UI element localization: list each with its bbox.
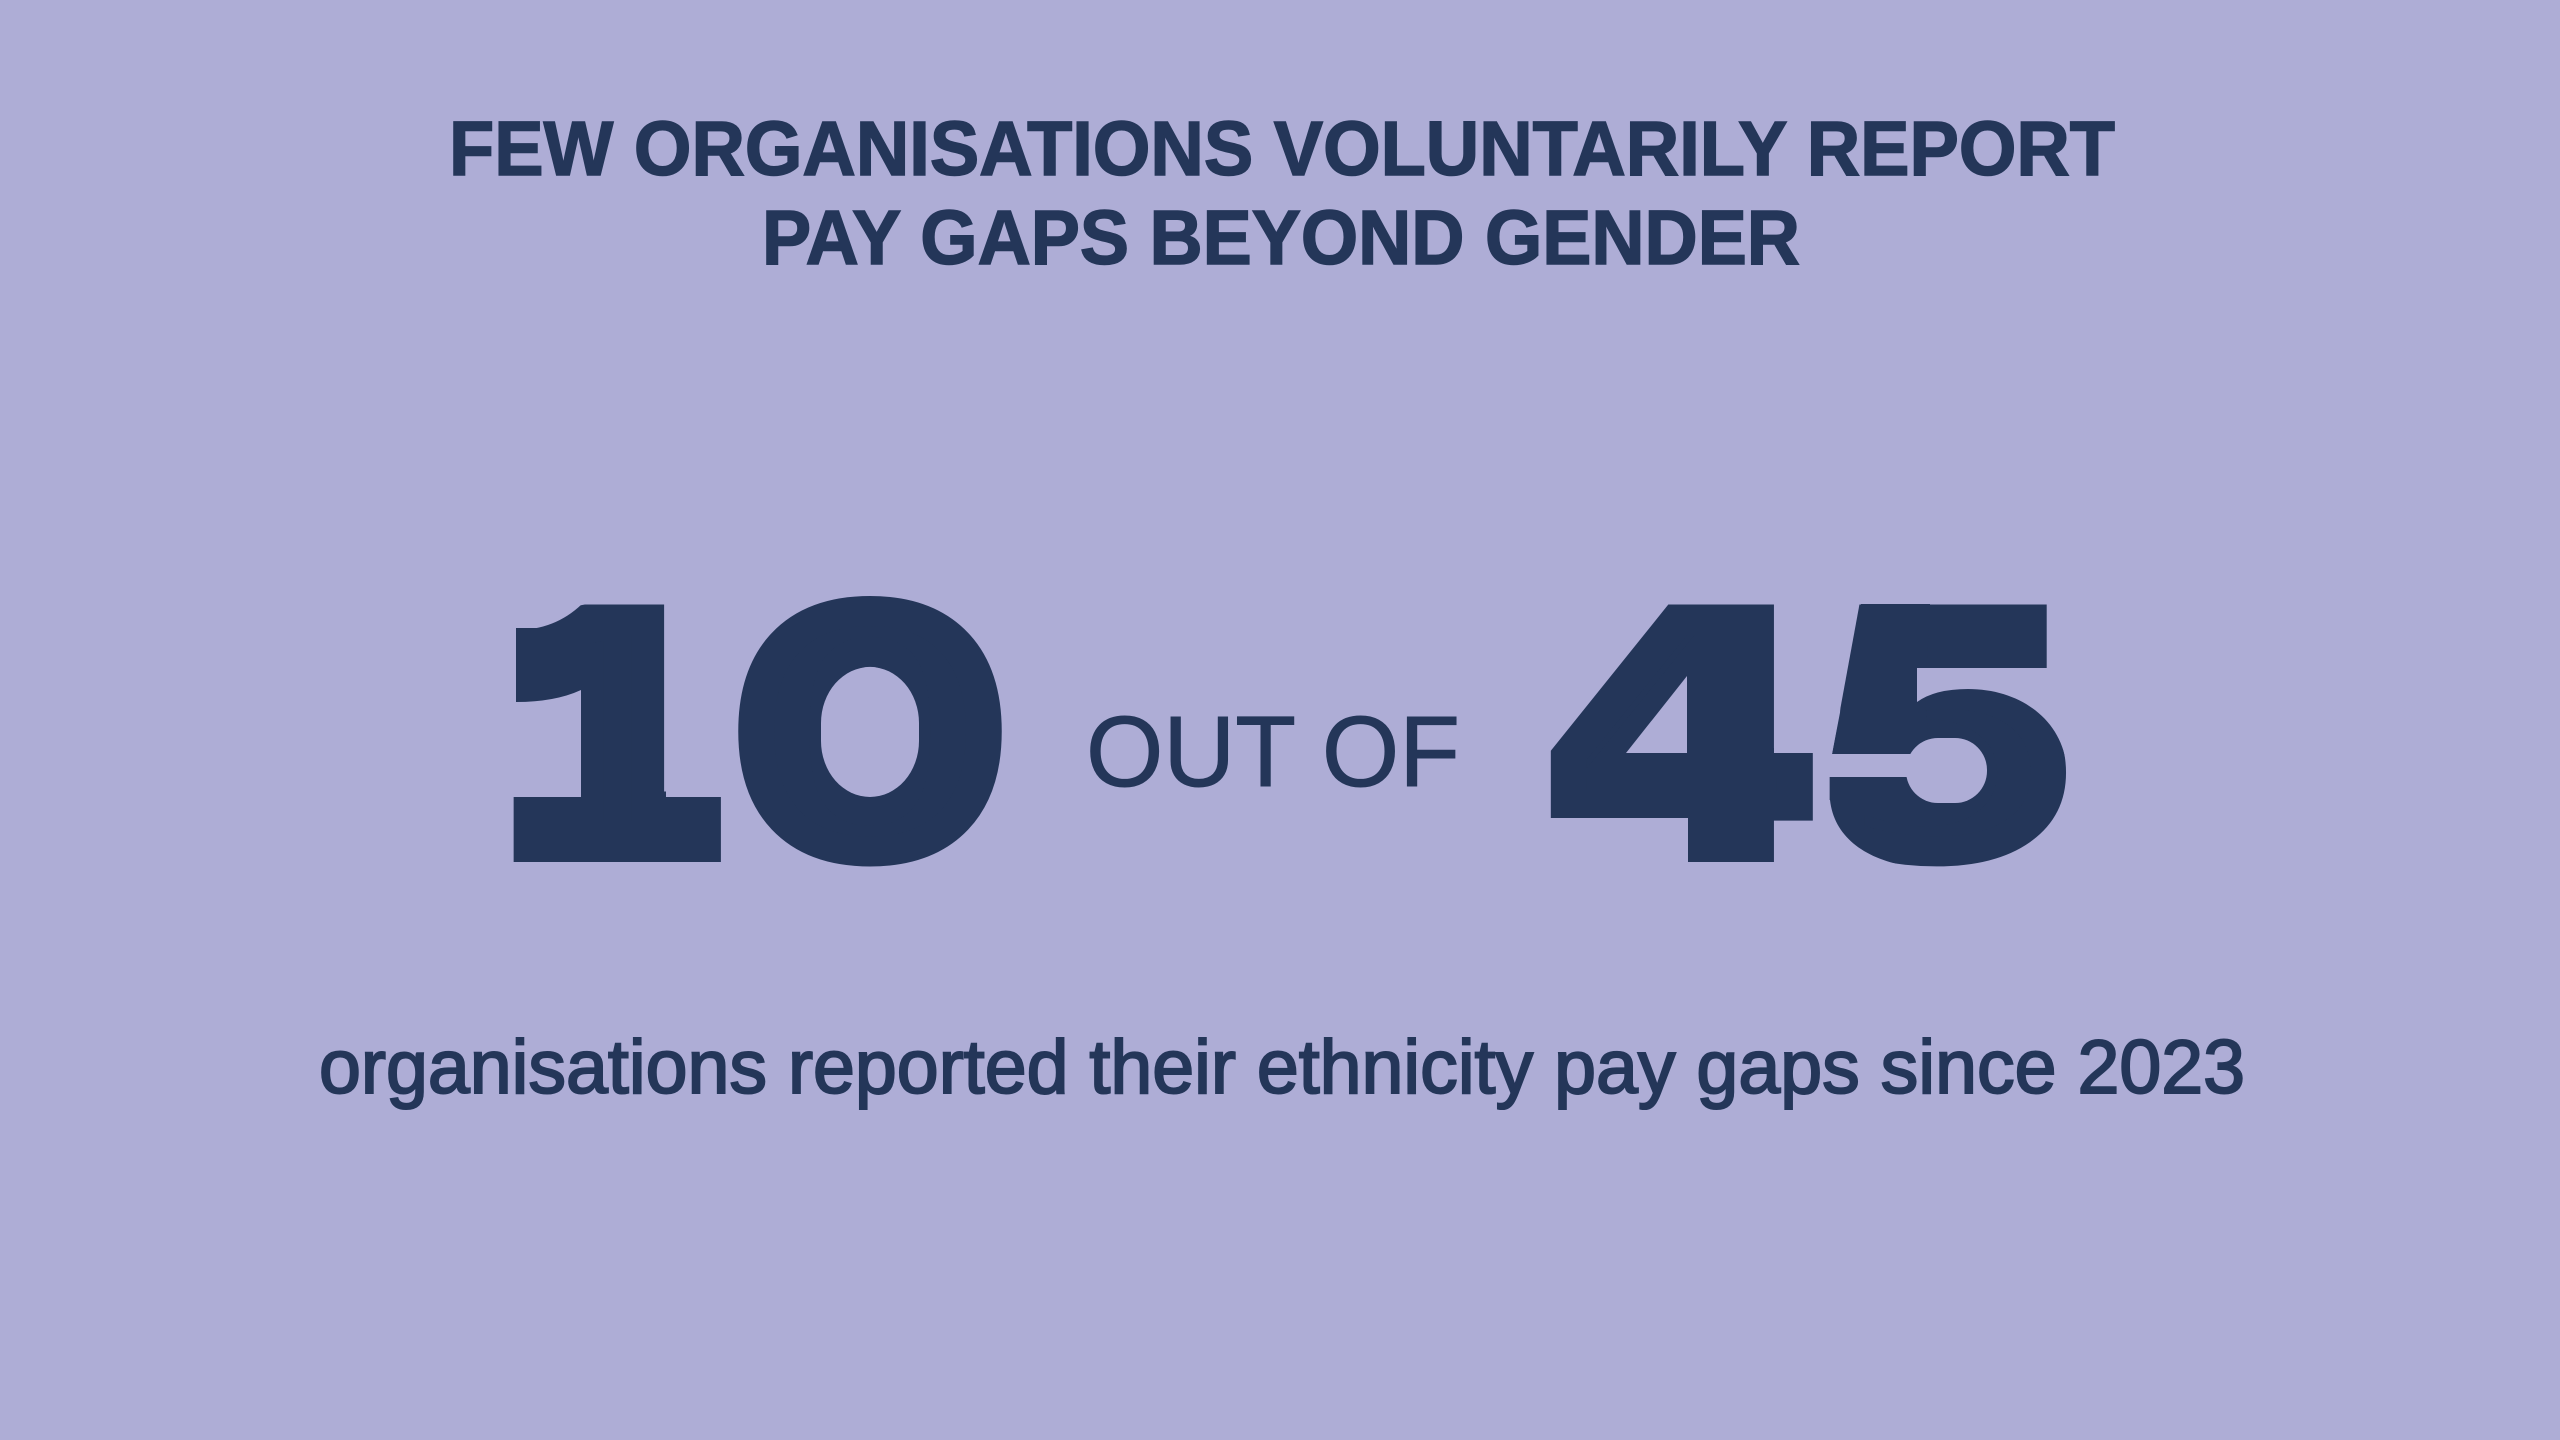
number: 45 bbox=[1540, 557, 2078, 921]
number: 45: 4 bbox=[1552, 557, 1812, 921]
title: PAY GAPS BEYOND GENDER bbox=[762, 195, 1800, 281]
number: 10 bbox=[490, 552, 1002, 922]
number: 10: 0 bbox=[738, 552, 1002, 922]
label: out of: OUT OF bbox=[1086, 696, 1460, 808]
caption: organisations reported their ethnicity pay gaps since 2023 bbox=[319, 1025, 2245, 1110]
number: 10: 1 bbox=[490, 557, 728, 921]
title bbox=[449, 106, 2115, 281]
number: 45: 5 bbox=[1819, 557, 2074, 921]
big statistic: 10 out of 45 bbox=[490, 552, 2078, 922]
title: FEW ORGANISATIONS VOLUNTARILY REPORT bbox=[449, 106, 2115, 192]
